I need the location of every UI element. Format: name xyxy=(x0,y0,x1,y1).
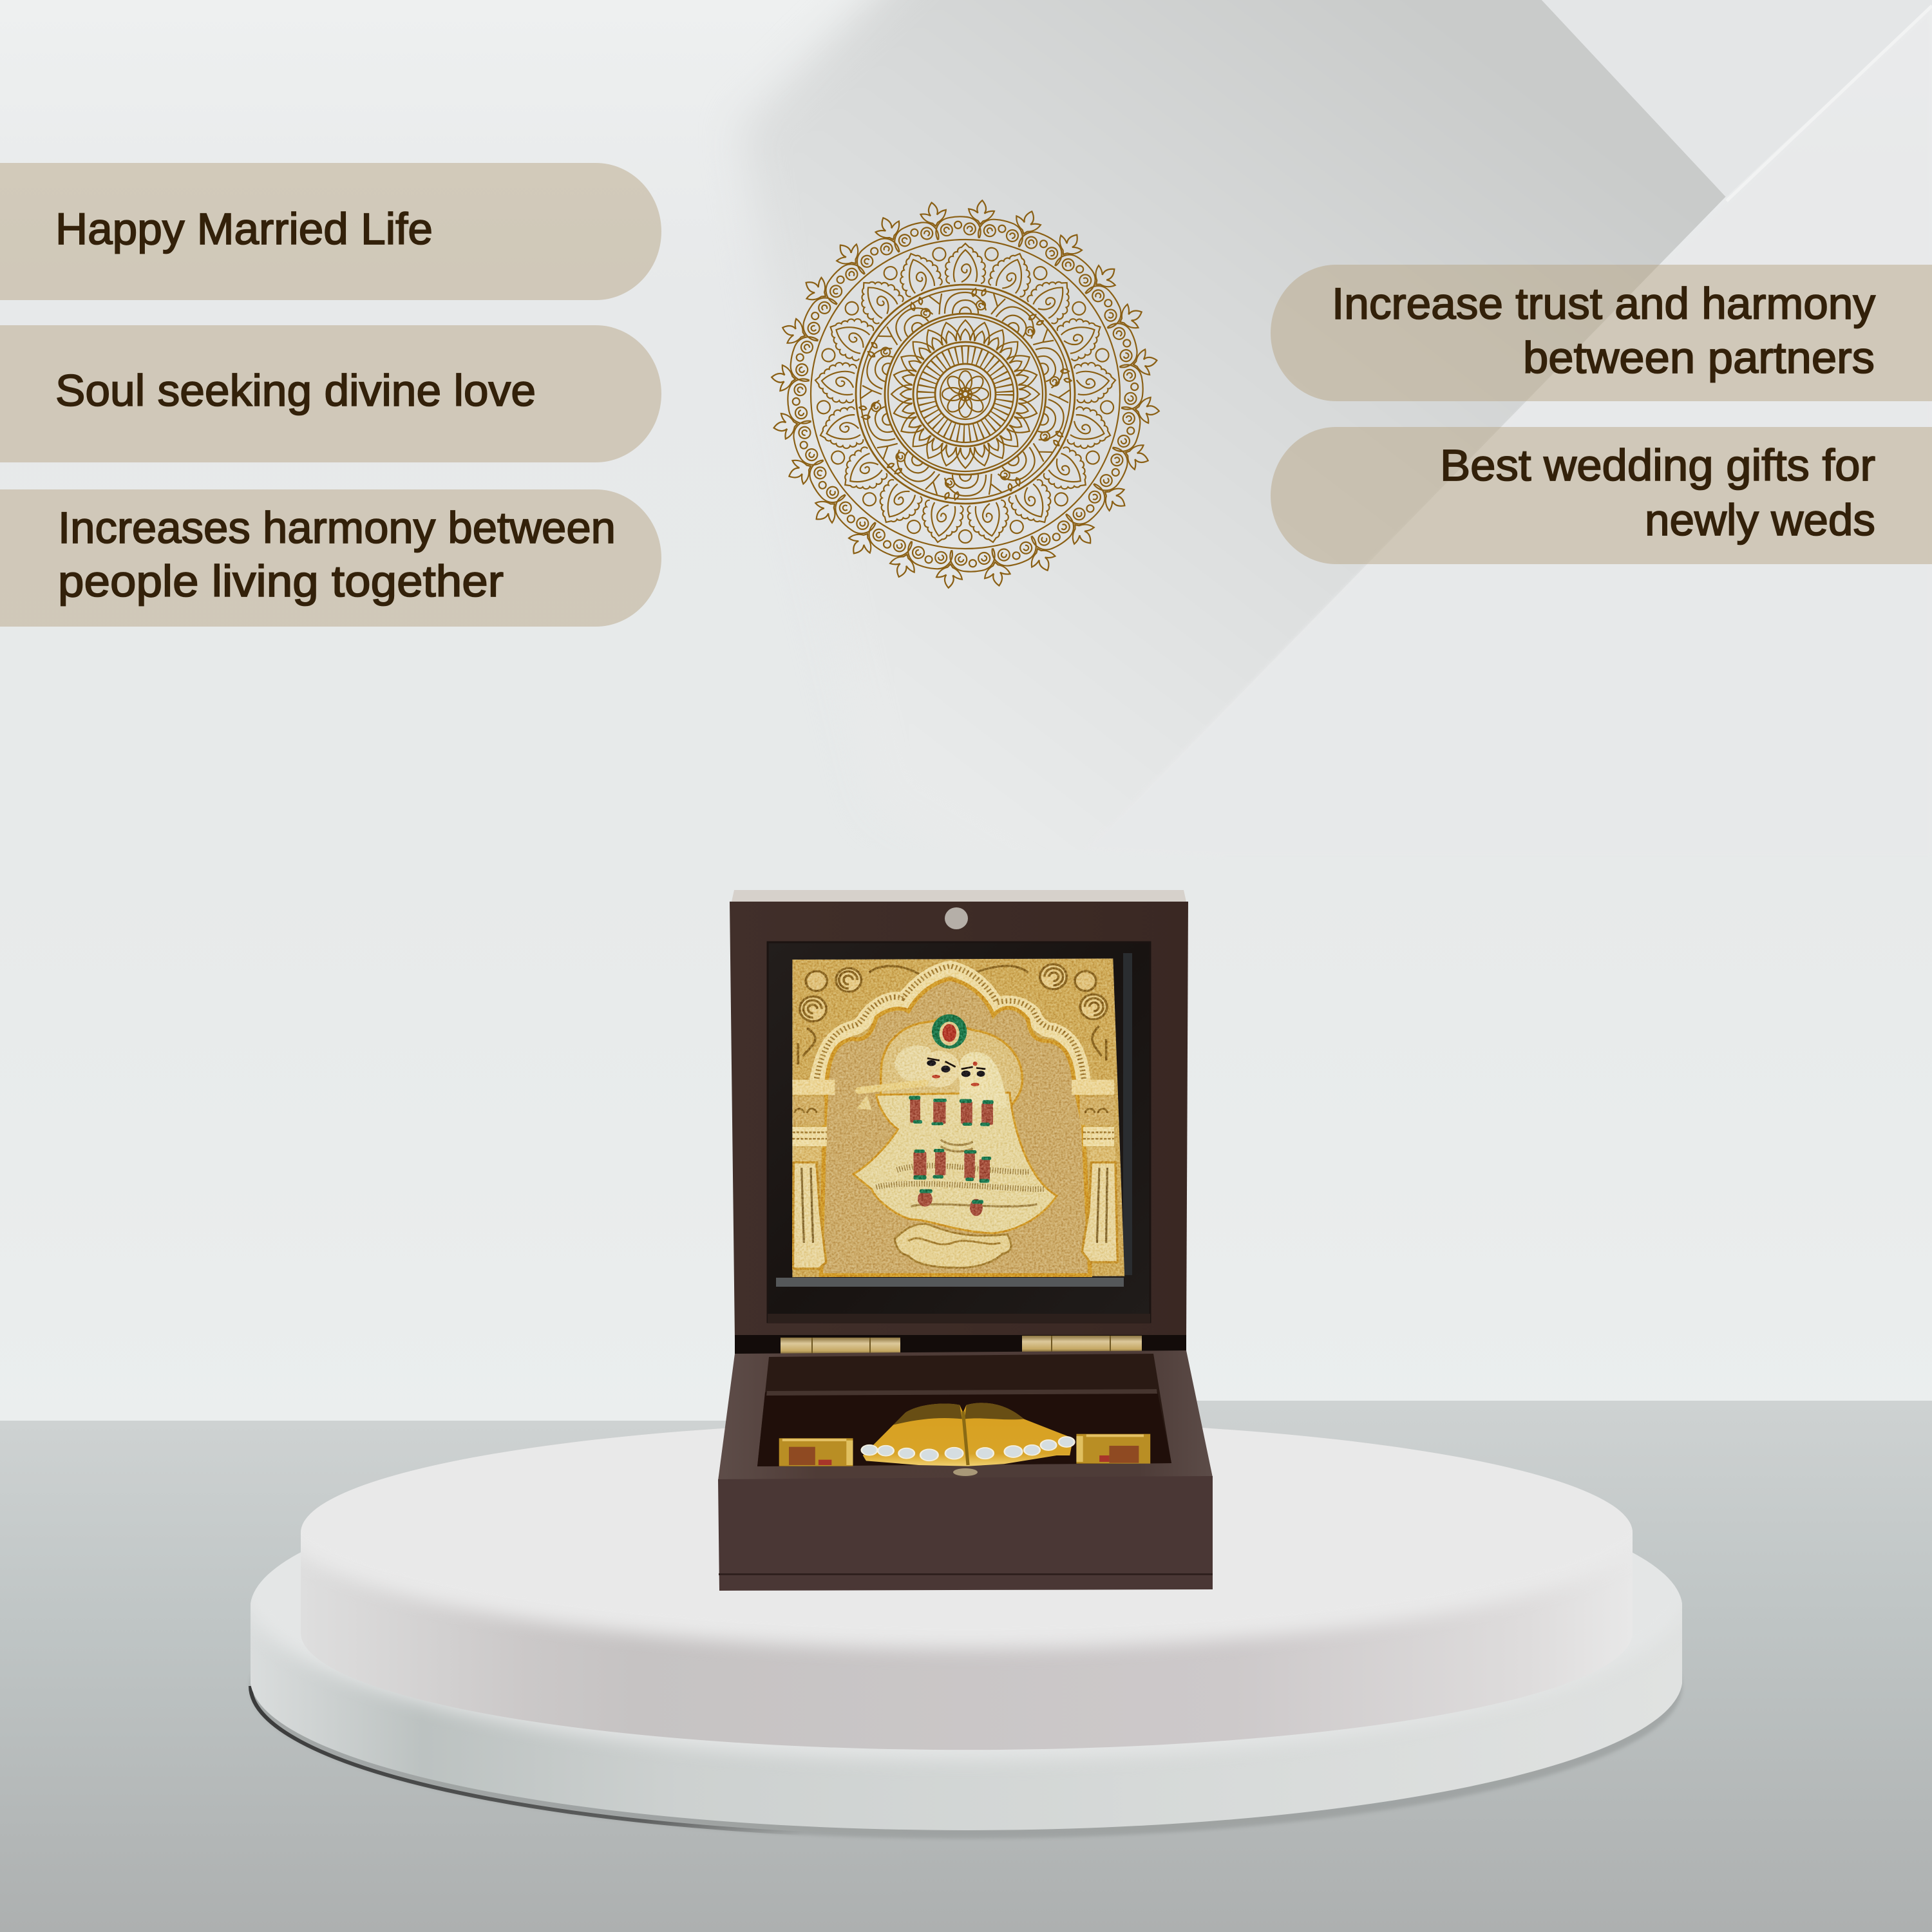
panel: right benefit pills xyxy=(1271,265,1932,564)
faces xyxy=(919,1051,960,1087)
corner scrollwork xyxy=(798,964,1107,1065)
pill: Soul seeking divine love: Soul seeking divine love xyxy=(55,366,536,415)
lid top edge xyxy=(732,890,1186,902)
floor xyxy=(0,1401,1932,1932)
plate base xyxy=(792,958,1124,1277)
pill: Best wedding gifts: Best wedding gifts for xyxy=(1440,440,1875,490)
pill: Best wedding gifts: newly weds xyxy=(1645,495,1875,545)
pill: Happy Married Life xyxy=(0,163,661,300)
arch outer band xyxy=(817,968,1083,1086)
pill: Best wedding gifts xyxy=(1271,427,1932,564)
product: open wooden box xyxy=(718,890,1213,1591)
dark gap behind hinges xyxy=(735,1335,1186,1354)
panel: left benefit pills xyxy=(0,163,661,627)
arch field xyxy=(821,979,1090,1275)
hinge right xyxy=(1022,1336,1142,1352)
gold inset in base xyxy=(779,1403,1150,1466)
gold plate: Radha Krishna relief xyxy=(792,958,1124,1277)
pill: Soul seeking divine love xyxy=(0,325,661,462)
halos xyxy=(881,1018,1022,1108)
figures xyxy=(853,1093,1057,1233)
kundan stones xyxy=(862,1437,1074,1461)
right gold panel xyxy=(1076,1434,1150,1464)
right pillar xyxy=(1072,1080,1118,1262)
background wall xyxy=(752,0,1932,703)
pill: Increase trust xyxy=(1271,265,1932,401)
icon: gold mandala xyxy=(766,194,1165,594)
pedestal xyxy=(242,1391,1690,1839)
box base front face xyxy=(718,1476,1213,1591)
lower disc xyxy=(251,1552,1682,1830)
left pillar xyxy=(792,1080,835,1269)
upper disc xyxy=(301,1428,1633,1750)
base front magnet dot xyxy=(953,1468,978,1476)
pill: Increase trust: Increase trust and harmony xyxy=(1332,279,1875,328)
glass window xyxy=(768,942,1150,1322)
pill: Increases harmony: people living together xyxy=(58,556,504,606)
hinge left xyxy=(781,1338,900,1354)
crown xyxy=(932,1014,967,1048)
gold feet xyxy=(863,1403,1073,1466)
lid magnet dot xyxy=(945,907,968,929)
box cavity xyxy=(757,1354,1171,1466)
pill: Happy Married Life: Happy Married Life xyxy=(55,204,433,254)
pedestal contact shadow xyxy=(250,1536,1682,1839)
pill: Increases harmony: Increases harmony between xyxy=(58,503,616,553)
pill: Increases harmony xyxy=(0,489,661,627)
flute xyxy=(859,1083,925,1090)
pill: Increase trust: between partners xyxy=(1523,333,1875,383)
lotus base xyxy=(895,1224,1011,1268)
garlands xyxy=(910,1098,993,1216)
left gold panel xyxy=(779,1438,853,1466)
box base top face xyxy=(718,1350,1213,1481)
hair and veil xyxy=(895,1045,947,1086)
box lid xyxy=(730,902,1188,1340)
